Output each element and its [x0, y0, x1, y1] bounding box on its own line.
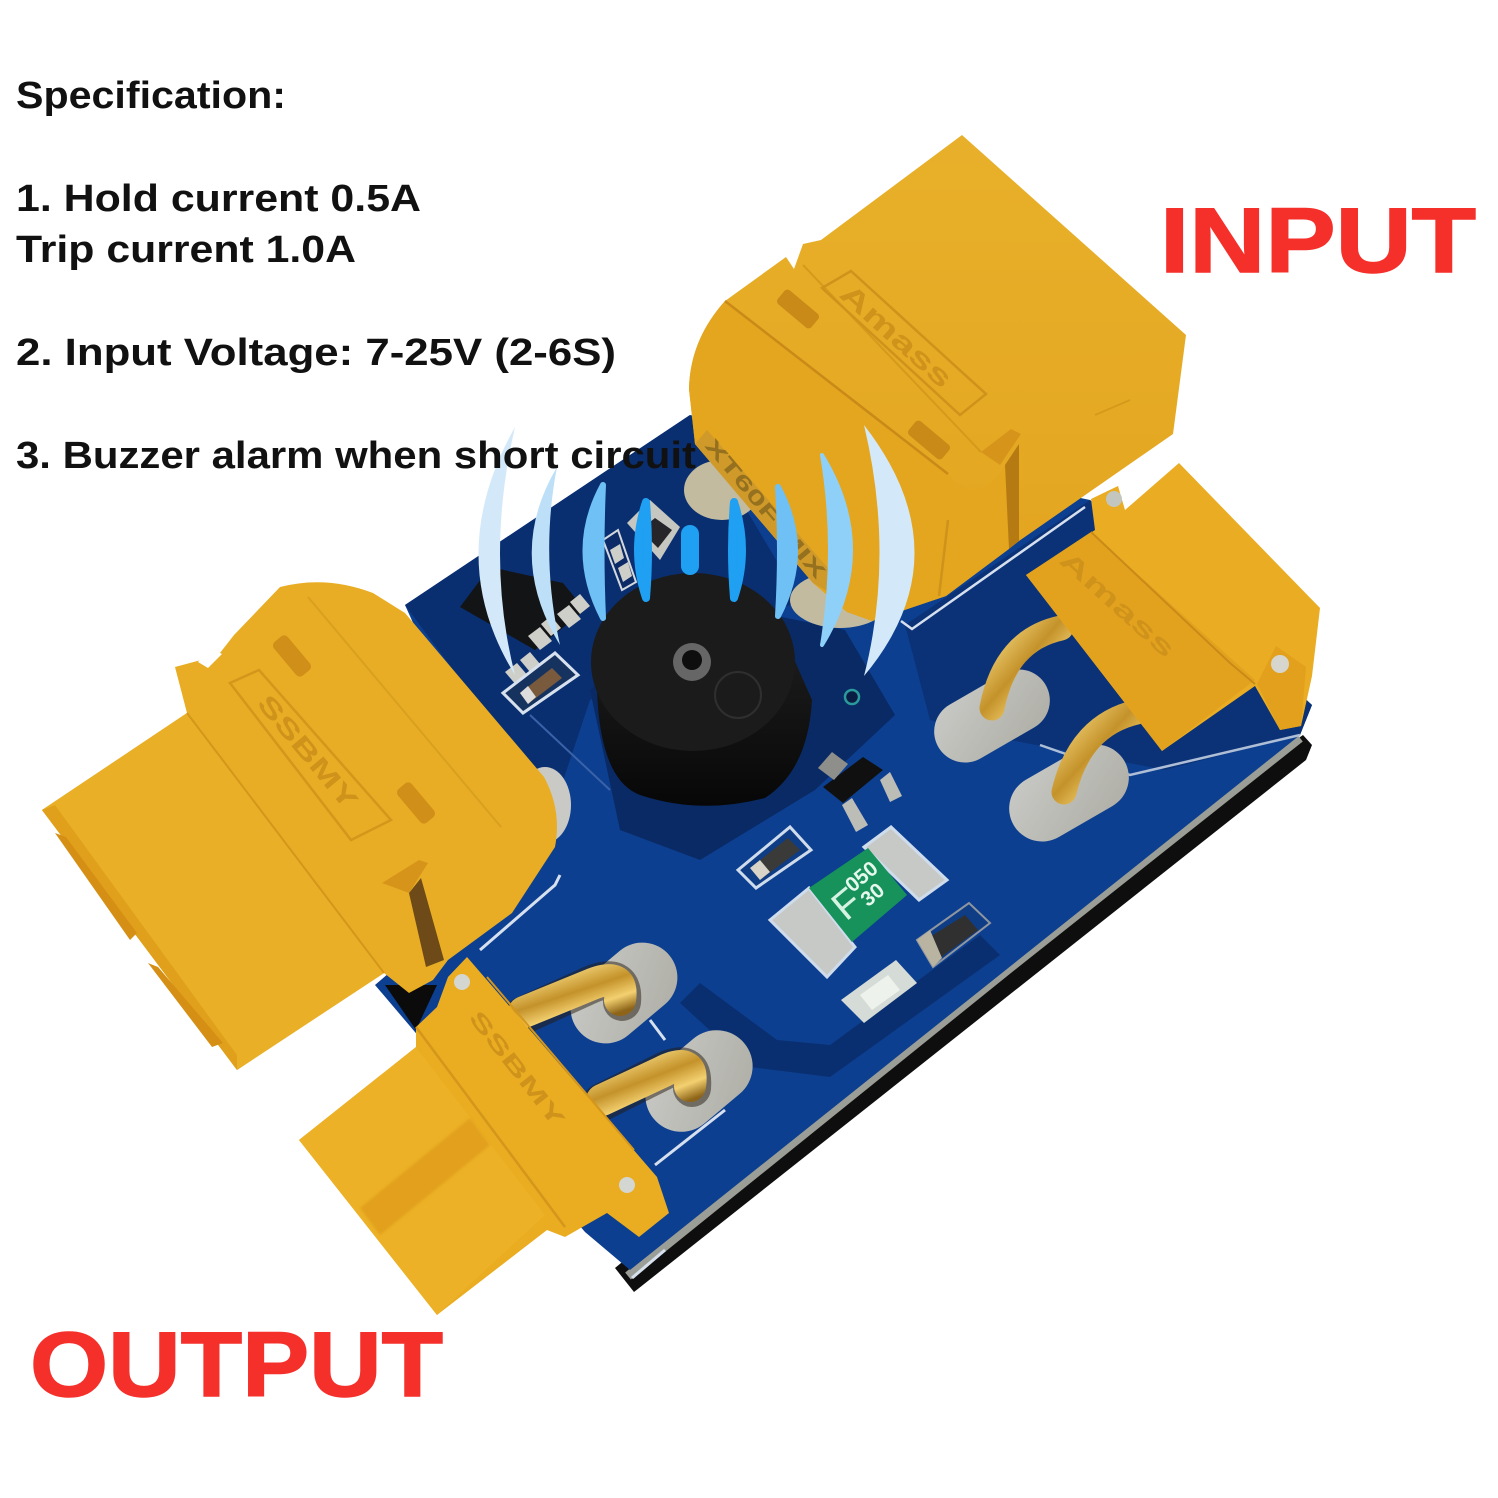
dark region right side: [905, 500, 1312, 770]
grey foam edge: [628, 738, 1300, 1276]
small XT30 input connector: [1026, 463, 1320, 751]
solder pads bottom: [524, 928, 767, 1147]
dark octagon pad under buzzer: [590, 600, 895, 860]
socket recesses: [55, 833, 137, 940]
transistor and via: [818, 690, 902, 832]
label: input: INPUT: [1160, 190, 1476, 292]
large XT60 output connector: SSBMY: [251, 689, 364, 815]
spec 1: hold and trip current: 1. Hold current 0.5A: [16, 178, 421, 220]
large XT60 input connector: [689, 135, 1186, 621]
small XT30 output connector: [299, 957, 669, 1315]
green fuse: 050: [841, 857, 883, 897]
small XT30 input connector: Amass: [1054, 546, 1180, 663]
resistor and LED: [841, 903, 990, 1023]
spec 3: buzzer alarm: 3. Buzzer alarm when short circuit: [16, 435, 696, 477]
spec 1: hold and trip current: Trip current 1.0A: [16, 229, 356, 271]
gold pins right: [992, 628, 1061, 708]
gold marked band XT60: [695, 430, 834, 595]
buzzer: [591, 573, 812, 806]
regulator chip: [460, 500, 680, 686]
large XT60 input connector: XT60F MIX: [700, 435, 830, 584]
sound wave arcs: [478, 425, 914, 676]
large XT60 input connector: Amass: [834, 277, 959, 394]
heading: specification: Specification:: [16, 75, 286, 117]
green fuse: 30: [856, 879, 889, 911]
green fuse: F: [824, 879, 871, 929]
beige solder pads under input connector: [684, 460, 890, 628]
black foam pad under board: [615, 735, 1312, 1292]
green fuse: [770, 827, 947, 977]
small SMD capacitor near regulator: [503, 653, 578, 713]
spec 1: hold and trip current: [16, 178, 421, 271]
PCB board: [375, 415, 1312, 1278]
small XT30 output connector: SSBMY: [464, 1006, 570, 1132]
silver pad behind output connector: [519, 767, 571, 843]
front body face: [42, 713, 384, 1070]
mounting tab: [1257, 646, 1306, 730]
spec 2: input voltage: 2. Input Voltage: 7-25V (2-6S): [16, 332, 616, 374]
resistor SMD: [738, 827, 811, 888]
label: output: OUTPUT: [30, 1314, 443, 1416]
gold pins bottom: [524, 980, 622, 1015]
front face of connector: [1026, 532, 1255, 751]
solder pads right: [923, 628, 1141, 854]
large XT60 output connector: [42, 582, 557, 1070]
dark region around regulator: [405, 415, 800, 790]
silkscreen outlines: [901, 507, 1085, 629]
rear rounded shell: [689, 301, 1009, 621]
dark trace band: [680, 935, 1000, 1077]
slots and label: [775, 288, 821, 330]
